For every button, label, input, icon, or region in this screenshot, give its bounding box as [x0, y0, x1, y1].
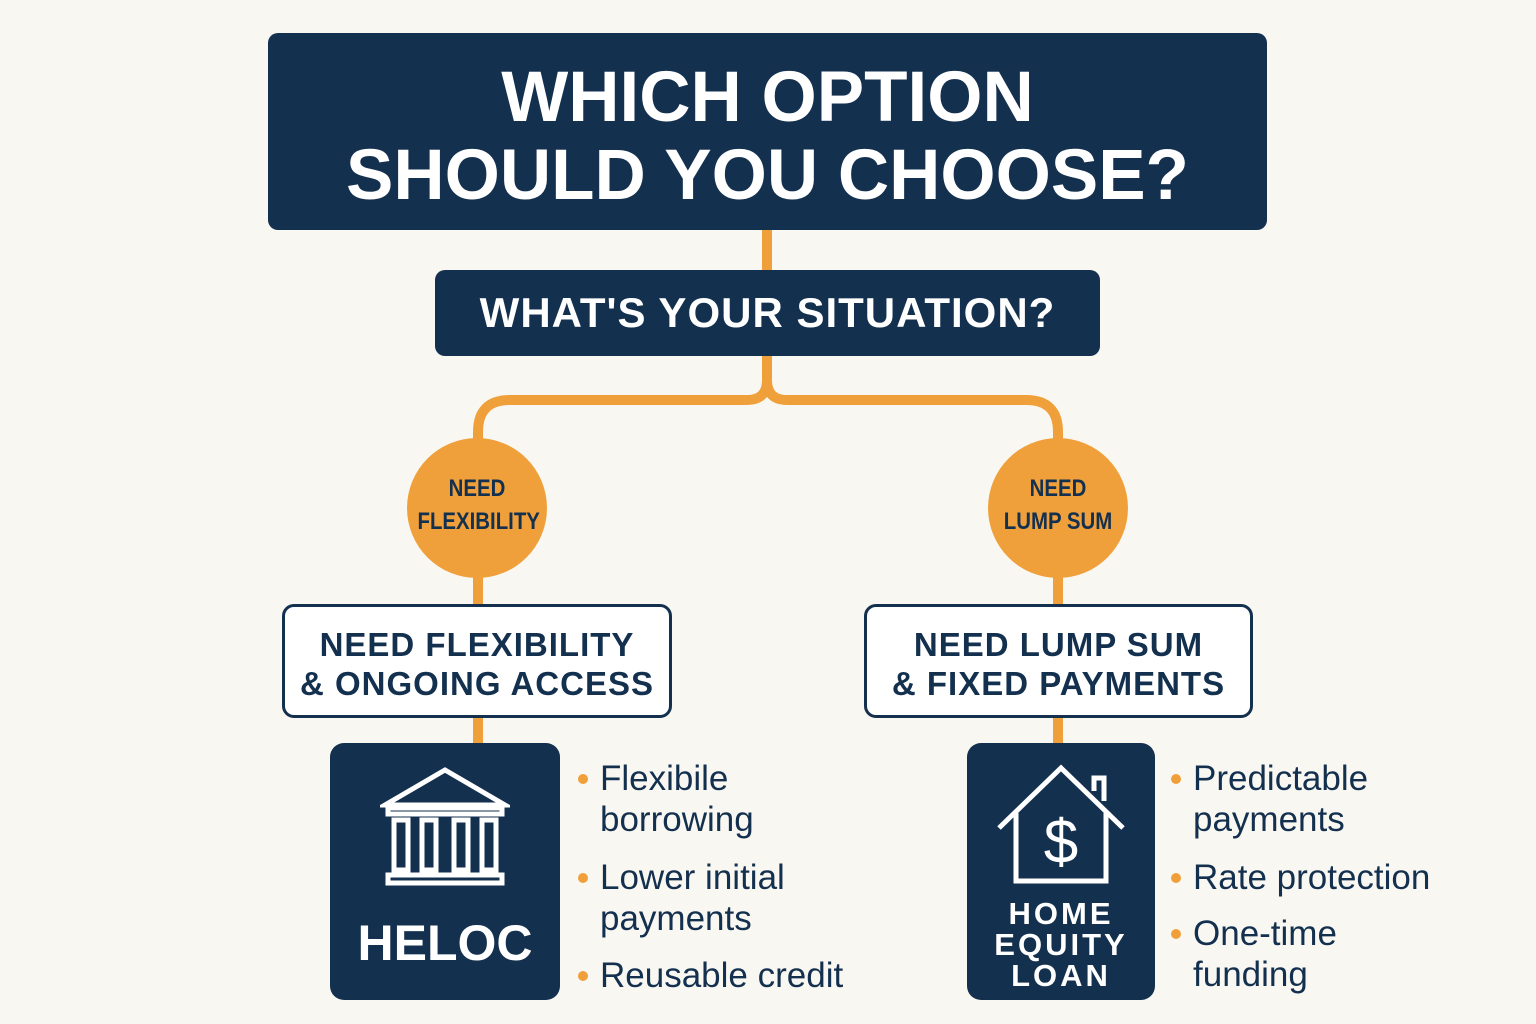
bullets: home equity loan benefits: Predictable [1193, 759, 1368, 798]
bullets: HELOC benefits: Flexibile [600, 759, 728, 798]
label: home equity loan [994, 896, 1128, 993]
icon: house with dollar [997, 764, 1125, 884]
situation heading: WHAT'S YOUR SITUATION? [480, 289, 1055, 336]
bullets: home equity loan benefits [1171, 759, 1430, 994]
label: HELOC: HELOC [358, 915, 532, 971]
situation heading [435, 270, 1100, 356]
box: flexibility & ongoing access: NEED FLEXIBILITY [320, 626, 634, 663]
icon: bank [380, 767, 510, 886]
label: home equity loan: LOAN [1011, 958, 1111, 993]
bullets: HELOC benefits: Reusable credit [600, 956, 843, 995]
bullets: HELOC benefits: Lower initial [600, 858, 785, 897]
box: flexibility & ongoing access [282, 604, 672, 718]
icon: house with dollar: $ [1044, 808, 1078, 877]
box: lump sum & fixed payments [864, 604, 1253, 718]
bullets: HELOC benefits [578, 759, 843, 995]
box: flexibility & ongoing access: & ONGOING ACCESS [300, 665, 654, 702]
circle: need lump sum: NEED [1030, 475, 1086, 502]
bullets: HELOC benefits: payments [600, 899, 752, 938]
bullets: home equity loan benefits: payments [1193, 800, 1345, 839]
panel: HELOC [330, 743, 560, 1000]
title: WHICH OPTION [501, 58, 1034, 137]
bullets: home equity loan benefits: One-time [1193, 914, 1337, 953]
circle: need lump sum [988, 438, 1128, 578]
box: lump sum & fixed payments: & FIXED PAYMENTS [892, 665, 1225, 702]
circle: need flexibility: NEED [449, 475, 505, 502]
panel: home equity loan [967, 743, 1155, 1000]
bullets: home equity loan benefits: funding [1193, 955, 1308, 994]
box: lump sum & fixed payments: NEED LUMP SUM [914, 626, 1203, 663]
title: SHOULD YOU CHOOSE? [346, 136, 1189, 215]
bullets: HELOC benefits: borrowing [600, 800, 754, 839]
circle: need lump sum: LUMP SUM [1004, 508, 1112, 535]
label: home equity loan: EQUITY [994, 927, 1128, 962]
circle: need flexibility: FLEXIBILITY [418, 508, 540, 535]
bullets: home equity loan benefits: Rate protection [1193, 858, 1430, 897]
label: home equity loan: HOME [1008, 896, 1114, 931]
circle: need flexibility [407, 438, 547, 578]
title [268, 33, 1267, 230]
